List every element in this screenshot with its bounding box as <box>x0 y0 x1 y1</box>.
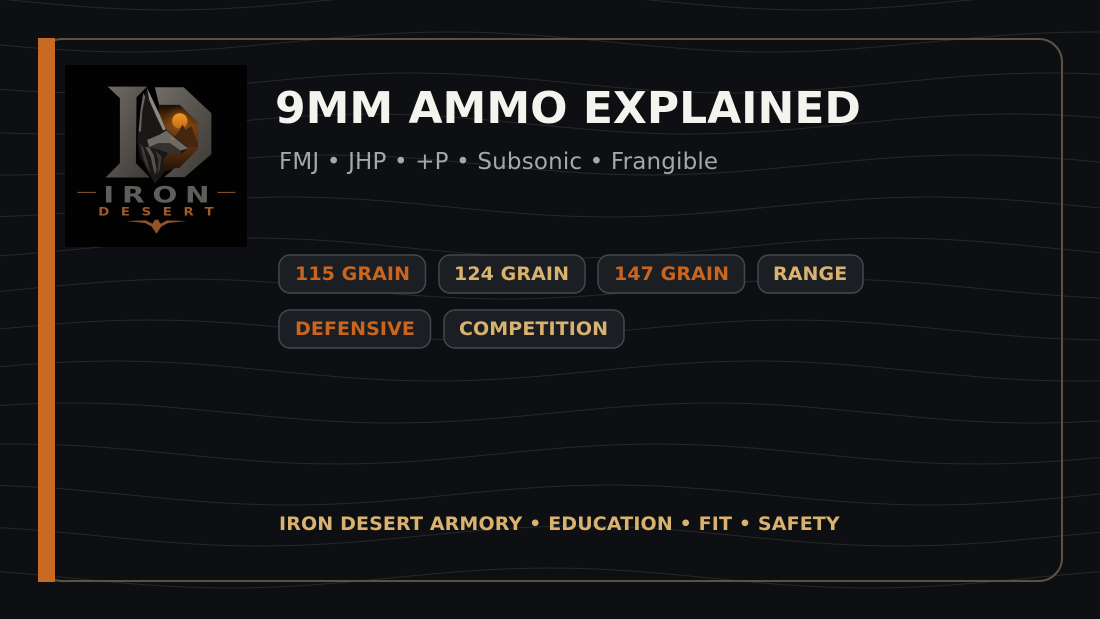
ornament <box>127 220 186 234</box>
logo: Iron Desert <box>65 65 247 247</box>
chip: 147 grain <box>598 255 744 293</box>
subtitle: FMJ • JHP • +P • Subsonic • Frangible <box>279 149 718 175</box>
logo word: IRON: IRON <box>103 182 217 208</box>
chip: 115 grain: 115 GRAIN <box>295 263 410 285</box>
title: 9MM AMMO EXPLAINED <box>275 83 861 134</box>
mountains <box>175 125 198 147</box>
chip: range <box>758 255 863 293</box>
chip: competition: COMPETITION <box>459 318 608 340</box>
chip: competition <box>444 310 624 348</box>
chip: defensive: DEFENSIVE <box>295 318 415 340</box>
landscape window <box>158 105 199 171</box>
footer tagline: IRON DESERT ARMORY • EDUCATION • FIT • SAFETY <box>279 513 840 535</box>
chip: range: RANGE <box>773 263 847 285</box>
chip: 115 grain <box>279 255 426 293</box>
chip: 147 grain: 147 GRAIN <box>614 263 729 285</box>
chip: defensive <box>279 310 430 348</box>
sun <box>163 104 196 138</box>
logo word: DESERT: DESERT <box>98 206 225 219</box>
letter D <box>155 87 211 177</box>
letter I <box>106 87 150 177</box>
divider lines <box>77 191 235 194</box>
chip: 124 grain <box>439 255 585 293</box>
fox head <box>137 88 188 184</box>
accent bar <box>38 38 54 582</box>
chip: 124 grain: 124 GRAIN <box>454 263 569 285</box>
